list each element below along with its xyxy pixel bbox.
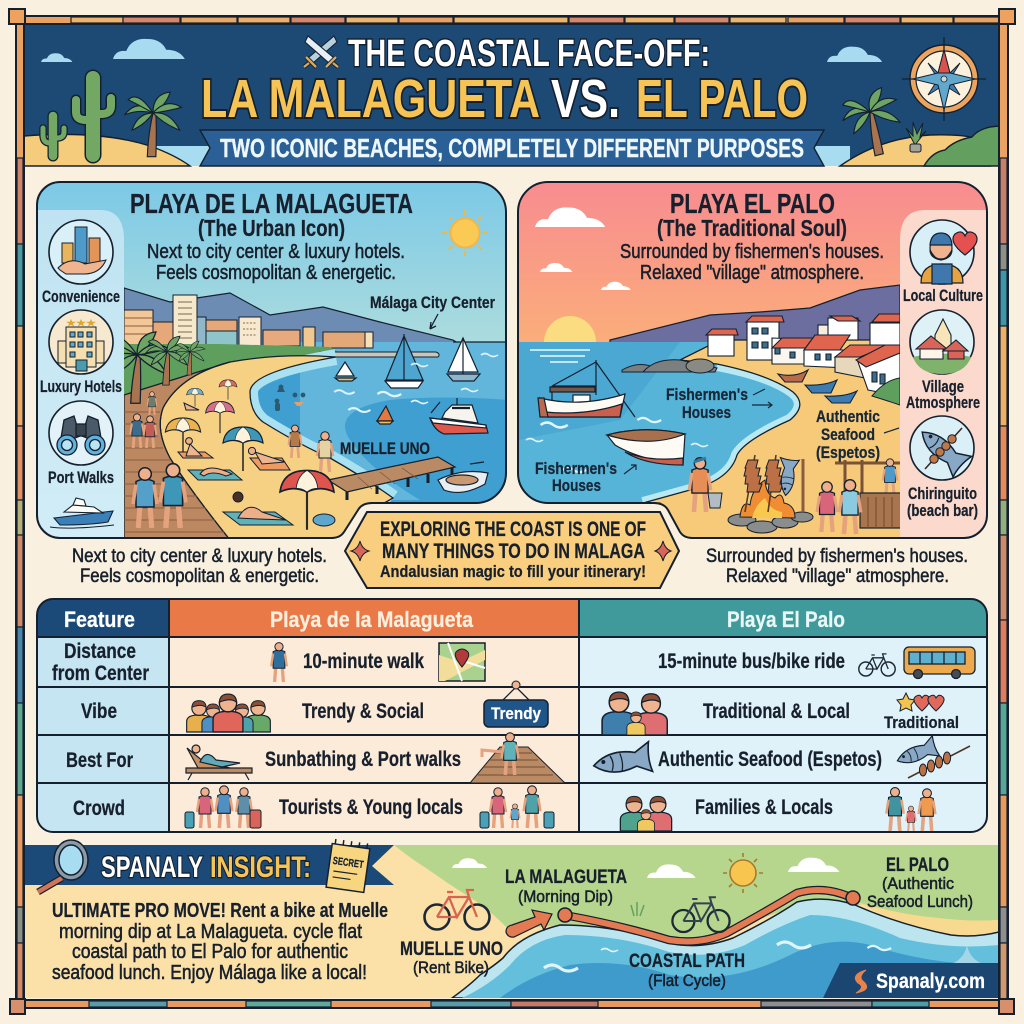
panel heading: PLAYA EL PALO <box>670 188 835 219</box>
icon: village <box>910 310 974 374</box>
water ripples <box>334 354 498 412</box>
label: Muelle Uno: MUELLE UNO <box>340 440 430 458</box>
label: Muelle Uno stop <box>400 939 503 977</box>
icon: bicycle <box>859 654 895 676</box>
rowboat <box>607 430 685 465</box>
label: Village Atmosphere <box>906 378 980 412</box>
ripples <box>526 418 708 472</box>
label: Chiringuito: (beach bar) <box>907 502 978 520</box>
callout: exploring the coast: Andalusian magic to fill your itinerary! <box>380 562 646 581</box>
icon: palm left <box>124 92 182 157</box>
icon: fish and skewer <box>893 736 970 778</box>
header banner <box>24 24 999 166</box>
row: crowd: Families & Locals <box>695 796 833 819</box>
icon: luxury hotels: ★★★ <box>66 318 97 328</box>
icon: family left <box>620 796 672 831</box>
label: Authentic Seafood: (Espetos) <box>816 444 880 462</box>
sand hill right <box>840 135 990 166</box>
mountains <box>124 287 456 344</box>
callout: exploring the coast <box>345 512 679 588</box>
water left <box>150 146 210 166</box>
row: crowd: Tourists & Young locals <box>279 796 463 819</box>
title line 1: THE COASTAL FACE-OFF: <box>348 33 710 75</box>
shallow water edge <box>643 365 800 503</box>
icon: dark bicycle <box>672 897 730 932</box>
village houses <box>706 314 900 396</box>
icon: sun lounger <box>186 745 252 780</box>
comparison table <box>37 599 987 832</box>
arrow to Malagueta <box>506 910 552 937</box>
text: pro move: seafood lunch. Enjoy Málaga like a local! <box>52 961 367 984</box>
label: Coastal Path <box>629 951 745 990</box>
icon: map pin <box>439 643 485 681</box>
clouds <box>452 858 839 878</box>
panel: Spanaly insight <box>24 839 999 998</box>
banner: Spanaly insight: INSIGHT: <box>210 851 311 884</box>
text: pro move: ULTIMATE PRO MOVE! Rent a bike at Muelle <box>52 900 388 922</box>
fire with espetos <box>728 455 813 533</box>
text: Malagueta caption <box>72 545 327 587</box>
row: best for: Best For <box>66 749 133 772</box>
icon: convenience <box>49 220 113 284</box>
boats: sailboats <box>335 334 480 424</box>
beach towels and sunbathers <box>178 403 335 526</box>
green park strip <box>124 344 345 395</box>
sea <box>258 341 505 502</box>
water right <box>810 146 850 166</box>
label: Fishermen's Houses upper: Fishermen's <box>666 386 748 404</box>
panel outline <box>518 182 987 538</box>
label: Chiringuito <box>907 485 978 520</box>
icon: secret note: SECRET <box>332 855 365 871</box>
row: vibe: Trendy & Social <box>302 700 424 723</box>
subtitle ribbon <box>200 130 824 166</box>
icon: magnifying glass <box>38 840 88 892</box>
icon sidebar <box>37 210 124 540</box>
cloud: large left <box>113 39 185 59</box>
label: Traditional: Traditional <box>884 713 959 732</box>
boat: moored launch <box>438 462 488 492</box>
row: crowd <box>73 786 935 831</box>
panel heading: (The Traditional Soul) <box>657 215 847 241</box>
bushes right <box>924 126 999 166</box>
row: distance: from Center <box>52 662 149 685</box>
label: Fishermen's Houses lower <box>535 460 636 495</box>
label: Muelle Uno stop: (Rent Bike) <box>413 958 489 977</box>
label: El Palo stop: Seafood Lunch) <box>867 892 973 911</box>
row: distance: 15-minute bus/bike ride <box>658 650 845 673</box>
panel heading: Relaxed "village" atmosphere. <box>640 261 864 284</box>
label: Fishermen's Houses lower: Houses <box>552 477 601 495</box>
icon: diamond left <box>351 541 369 561</box>
label: El Palo stop: EL PALO <box>886 855 949 876</box>
icon: family with luggage <box>480 786 554 828</box>
cloud: right <box>827 47 882 62</box>
label: Fishermen's Houses lower: Fishermen's <box>535 460 617 478</box>
fisherman with bucket <box>689 458 722 512</box>
sand shoulder right <box>850 900 999 940</box>
icon: friends group <box>187 694 270 732</box>
icon: fish <box>592 742 653 779</box>
faint star <box>943 945 991 988</box>
table header: Feature <box>64 607 135 632</box>
people on promenade <box>130 392 333 528</box>
icon: fish skewer <box>910 416 974 480</box>
text: pro move: morning dip at La Malagueta. cycle flat <box>59 920 362 943</box>
panel heading <box>130 188 413 284</box>
table header: Playa de la Malagueta <box>270 607 474 632</box>
row: distance: Distance <box>64 640 136 663</box>
title: El Palo: EL PALO <box>636 69 808 129</box>
panel outline <box>37 182 506 538</box>
icon: tourists with luggage <box>185 786 261 828</box>
brand plate <box>823 963 999 998</box>
banner: Spanaly insight <box>24 845 394 885</box>
title: vs: VS. <box>551 69 620 129</box>
shallow water edge <box>250 357 393 498</box>
rocks <box>622 359 717 373</box>
label: Malaga City Center <box>370 294 495 329</box>
label: Coastal Path: (Flat Cycle) <box>648 971 726 990</box>
label: Authentic Seafood <box>816 408 899 462</box>
sun <box>442 210 488 256</box>
icon: grass <box>631 902 644 916</box>
cloud: small left <box>41 53 72 62</box>
label: El Palo stop <box>867 855 973 911</box>
icon: woman on boardwalk <box>470 733 565 783</box>
icon: small cactus <box>43 116 64 156</box>
title: La Malagueta: LA MALAGUETA <box>201 69 540 129</box>
table header <box>64 607 845 632</box>
row: vibe: Vibe <box>81 700 117 723</box>
fishing boat <box>538 360 635 417</box>
text: El Palo caption <box>706 545 968 587</box>
label: Port Walks: Port Walks <box>48 469 114 487</box>
green land <box>394 845 999 950</box>
icon: walker <box>271 643 287 682</box>
swimmers <box>275 385 305 411</box>
label: Chiringuito: Chiringuito <box>908 485 977 503</box>
panel heading <box>620 188 884 284</box>
beach umbrellas <box>165 380 334 530</box>
icon: couple with child <box>602 692 667 735</box>
label: Local Culture: Local Culture <box>903 287 983 305</box>
boat: motor yacht <box>430 398 488 434</box>
row: distance: 10-minute walk <box>303 650 424 673</box>
row: distance <box>52 640 975 685</box>
row: best for <box>66 733 970 783</box>
icon: yacht <box>50 498 114 528</box>
sand hill left <box>24 134 190 166</box>
label: Fishermen's Houses upper <box>666 386 772 422</box>
icon: bus <box>904 647 975 678</box>
clouds <box>535 207 631 290</box>
sand beach <box>160 356 393 540</box>
panel heading: Next to city center & luxury hotels. <box>147 240 405 263</box>
label: Luxury Hotels: Luxury Hotels <box>40 378 122 396</box>
coastal path route <box>558 890 860 941</box>
icon: large cactus <box>76 78 111 155</box>
badge: Trendy <box>484 681 548 727</box>
label: La Malagueta stop: LA MALAGUETA <box>505 867 627 888</box>
green shrubs <box>872 378 900 405</box>
text: Malagueta caption: Feels cosmopolitan & energetic. <box>80 565 319 587</box>
beached boats <box>778 370 857 403</box>
text: Malagueta caption: Next to city center & luxury hotels. <box>72 545 327 567</box>
label: Malaga City Center: Málaga City Center <box>370 294 495 312</box>
row: crowd: Crowd <box>73 797 125 820</box>
icon sidebar <box>900 210 987 540</box>
purple mountains <box>609 284 900 342</box>
icon: diamond right <box>655 541 671 561</box>
panel heading: PLAYA DE LA MALAGUETA <box>130 188 413 219</box>
label: El Palo stop: (Authentic <box>882 874 954 893</box>
panel heading: (The Urban Icon) <box>198 215 345 241</box>
row: best for: Authentic Seafood (Espetos) <box>658 748 882 771</box>
row: vibe <box>81 681 959 735</box>
panel: Playa de la Malagueta <box>37 182 510 540</box>
icon: luxury hotels <box>49 310 113 374</box>
icon: palm trees <box>124 331 206 404</box>
icon: local culture <box>910 220 977 284</box>
sand beach <box>643 340 905 540</box>
text: El Palo caption: Relaxed "village" atmosphere. <box>726 565 949 587</box>
panel: Playa El Palo <box>518 182 988 540</box>
text: pro move: coastal path to El Palo for authentic <box>72 940 348 963</box>
label: Authentic Seafood: Authentic <box>816 408 880 426</box>
icon: sun <box>723 853 763 893</box>
icon: family right <box>886 788 935 831</box>
label: Authentic Seafood: Seafood <box>821 426 875 444</box>
callout: exploring the coast: MANY THINGS TO DO IN MALAGA <box>382 540 645 563</box>
wooden promenade <box>124 362 230 540</box>
callout: exploring the coast: EXPLORING THE COAST IS ONE OF <box>380 518 646 541</box>
icon: red bicycle <box>424 890 490 930</box>
sea <box>518 342 808 507</box>
text: pro move <box>52 900 388 984</box>
row: vibe: Traditional & Local <box>703 700 850 723</box>
label: Village Atmosphere: Atmosphere <box>906 394 980 412</box>
label: Fishermen's Houses upper: Houses <box>682 404 731 422</box>
text: El Palo caption: Surrounded by fishermen's houses. <box>706 545 968 567</box>
icon: secret note <box>326 839 371 892</box>
badge: Trendy: Trendy <box>491 704 541 723</box>
subtitle ribbon: TWO ICONIC BEACHES, COMPLETELY DIFFERENT PURPOSES <box>220 133 804 163</box>
chiringuito beach bar <box>817 459 902 534</box>
label: Muelle Uno stop: MUELLE UNO <box>400 939 503 960</box>
label: Convenience: Convenience <box>42 288 120 306</box>
label: Coastal Path: COASTAL PATH <box>629 951 745 972</box>
port breakwater <box>320 352 439 357</box>
icon: compass <box>902 37 986 121</box>
banner: Spanaly insight: SPANALY <box>101 851 203 884</box>
jetty: Muelle Uno <box>328 457 455 500</box>
city skyline <box>124 295 373 350</box>
label: La Malagueta stop <box>505 867 627 906</box>
row: best for: Sunbathing & Port walks <box>265 748 461 771</box>
water <box>452 899 999 998</box>
brand plate: Spanaly.com <box>876 970 985 993</box>
icon: binoculars <box>49 401 113 465</box>
setting sun <box>544 316 596 342</box>
label: La Malagueta stop: (Morning Dip) <box>518 887 613 906</box>
table header: Playa El Palo <box>727 607 845 632</box>
icon: crossed swords <box>304 36 338 67</box>
icon: star and hearts <box>897 693 944 711</box>
label: Village Atmosphere: Village <box>922 378 964 396</box>
panel heading: Surrounded by fishermen's houses. <box>620 240 884 263</box>
panel heading: Feels cosmopolitan & energetic. <box>156 261 396 284</box>
icon: palm right <box>837 85 908 161</box>
icon: agave <box>906 122 926 152</box>
